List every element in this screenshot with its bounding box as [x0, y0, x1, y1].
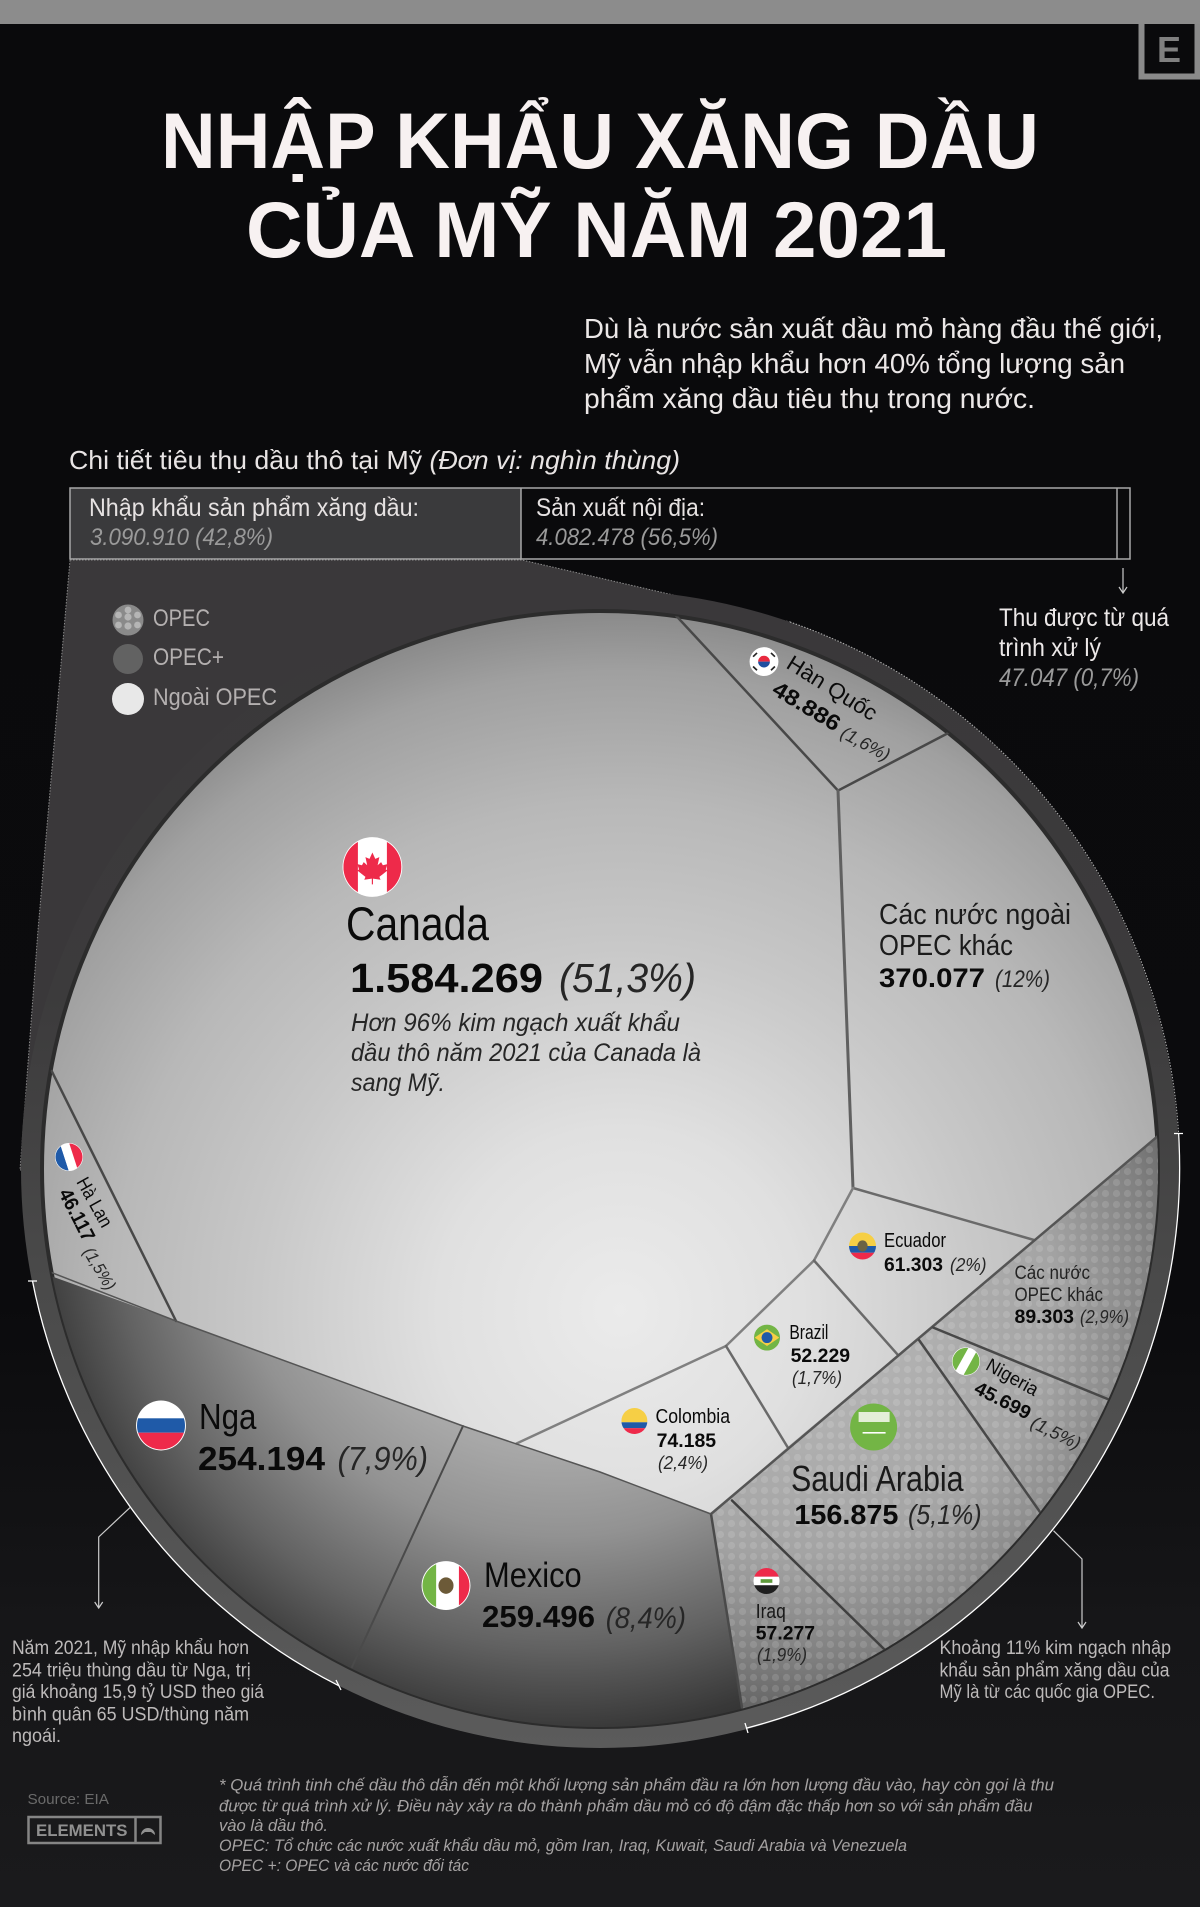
label: Russia: 254.194 — [198, 1440, 326, 1477]
flag: Netherlands — [55, 1143, 83, 1171]
label: other OPEC countries: OPEC khác — [1014, 1285, 1103, 1306]
legend item: OPEC+ — [113, 644, 224, 674]
footnotes: vào là dầu thô. — [219, 1816, 328, 1835]
label: Ecuador — [849, 1230, 986, 1276]
label: Ecuador: (2%) — [950, 1255, 986, 1275]
stacked bar: crude oil consumption split: Nhập khẩu sản phẩm xăng dầu: — [89, 494, 419, 522]
label: Iraq: (1,9%) — [757, 1645, 807, 1665]
label: other non-OPEC countries — [879, 899, 1071, 993]
legend — [112, 604, 277, 715]
leader arrow: Russia note — [95, 1508, 130, 1608]
note: refinery processing gain: trình xử lý — [999, 634, 1101, 662]
label: Colombia: 74.185 — [657, 1431, 717, 1452]
label: Russia: (7,9%) — [338, 1440, 428, 1477]
note: Russia imports: ngoái. — [12, 1726, 61, 1747]
label: Mexico: 259.496 — [482, 1599, 595, 1634]
intro text — [584, 313, 1163, 414]
label: Russia: Nga — [199, 1396, 257, 1437]
legend item: non-OPEC — [112, 683, 277, 715]
logo: Elements: ELEMENTS — [36, 1821, 128, 1840]
note: OPEC share: khẩu sản phẩm xăng dầu của — [940, 1660, 1170, 1682]
label: Mexico — [422, 1556, 686, 1635]
footnotes: * Quá trình tinh chế dầu thô dẫn đến một khối lượng sản phẩm đầu ra lớn hơn lượng đầu vào, hay còn gọi là thu — [219, 1775, 1055, 1794]
label: Saudi Arabia — [791, 1404, 982, 1530]
label: Nigeria: 45.699 — [971, 1378, 1034, 1424]
label: Ecuador: 61.303 — [884, 1255, 943, 1276]
segment dividers — [40, 612, 1165, 1708]
flag: Ecuador — [849, 1232, 876, 1260]
note: refinery processing gain: Thu được từ quá — [999, 604, 1169, 632]
label: Canada: (51,3%) — [559, 955, 696, 1001]
flag: Colombia — [621, 1408, 647, 1434]
label: Nigeria: Nigeria — [982, 1355, 1042, 1401]
label: Canada: sang Mỹ. — [351, 1069, 445, 1097]
footnotes — [219, 1775, 1055, 1875]
note: Russia imports: Năm 2021, Mỹ nhập khẩu hơn — [12, 1638, 249, 1659]
chart: circular treemap of imports by country — [0, 590, 1200, 1790]
flag: South Korea — [750, 647, 778, 676]
label: Brazil: (1,7%) — [792, 1368, 842, 1388]
intro text: Dù là nước sản xuất dầu mỏ hàng đầu thế giới, — [584, 313, 1163, 344]
legend item: OPEC — [112, 604, 210, 636]
label: Netherlands — [55, 1143, 116, 1290]
label: Iraq: 57.277 — [756, 1624, 815, 1645]
bracket arc: OPEC note — [745, 1134, 1183, 1733]
label: Netherlands: (1,5%) — [79, 1244, 120, 1294]
flag: Mexico — [422, 1561, 470, 1610]
flag: Nigeria — [952, 1347, 980, 1376]
flag: Iraq — [754, 1568, 780, 1594]
logo: E badge — [1142, 24, 1198, 76]
label: South Korea: 48.886 — [768, 676, 845, 736]
bar chart heading: Chi tiết tiêu thụ dầu thô tại Mỹ (Đơn vị: nghìn thùng) — [69, 445, 680, 475]
stacked bar: crude oil consumption split: 4.082.478 (56,5%) — [536, 524, 718, 551]
label: other OPEC countries — [1014, 1263, 1129, 1328]
stacked bar: crude oil consumption split — [70, 488, 1130, 559]
stacked bar: crude oil consumption split: Sản xuất nội địa: — [536, 494, 705, 522]
flag: Brazil — [754, 1325, 780, 1351]
arrow to refinery gain note — [1119, 568, 1127, 593]
legend item: OPEC+: OPEC+ — [153, 644, 224, 671]
label: Canada: Canada — [346, 897, 490, 950]
label: other non-OPEC countries: OPEC khác — [879, 930, 1013, 962]
footnotes: OPEC +: OPEC và các nước đối tác — [219, 1856, 469, 1875]
label: Brazil — [754, 1322, 850, 1388]
footnotes: OPEC: Tổ chức các nước xuất khẩu dầu mỏ, gồm Iran, Iraq, Kuwait, Saudi Arabia và Venezuela — [219, 1836, 907, 1855]
label: other non-OPEC countries: (12%) — [995, 966, 1050, 993]
flag: Russia — [136, 1401, 186, 1450]
note: OPEC share: Mỹ là từ các quốc gia OPEC. — [940, 1682, 1155, 1703]
flag: Saudi Arabia — [850, 1404, 897, 1450]
label: Canada: dầu thô năm 2021 của Canada là — [351, 1039, 701, 1067]
note: refinery processing gain: 47.047 (0,7%) — [999, 664, 1139, 692]
legend item: non-OPEC: Ngoài OPEC — [153, 684, 277, 711]
label: Iraq: Iraq — [756, 1601, 786, 1623]
label: other non-OPEC countries: 370.077 — [879, 963, 985, 993]
label: Russia — [136, 1396, 428, 1477]
logo: E badge: E — [1157, 29, 1181, 70]
note: OPEC share: Khoảng 11% kim ngạch nhập — [940, 1638, 1171, 1659]
note: Russia imports: 254 triệu thùng dầu từ Nga, trị — [12, 1660, 251, 1682]
label: Colombia: (2,4%) — [658, 1453, 708, 1473]
leader arrow: OPEC note — [1054, 1531, 1086, 1628]
label: Mexico: Mexico — [484, 1556, 582, 1595]
label: Netherlands: Hà Lan — [72, 1174, 116, 1231]
label: Nigeria: (1,5%) — [1028, 1412, 1084, 1454]
label: South Korea: (1,6%) — [837, 723, 894, 765]
label: Mexico: (8,4%) — [606, 1602, 686, 1635]
label: Canada — [343, 837, 701, 1097]
intro text: phẩm xăng dầu tiêu thụ trong nước. — [584, 383, 1035, 414]
note: Russia imports — [12, 1638, 264, 1747]
label: Saudi Arabia: 156.875 — [794, 1499, 898, 1530]
segment: OPEC countries — [712, 1138, 1158, 1708]
note: refinery processing gain — [999, 604, 1169, 692]
wedge linking imports bar to circle — [20, 560, 790, 1170]
logo: Elements — [28, 1817, 160, 1843]
legend item: OPEC: OPEC — [153, 605, 210, 632]
label: other non-OPEC countries: Các nước ngoài — [879, 899, 1071, 931]
title: CỦA MỸ NĂM 2021 — [246, 185, 947, 274]
intro text: Mỹ vẫn nhập khẩu hơn 40% tổng lượng sản — [584, 348, 1125, 379]
label: Ecuador: Ecuador — [884, 1230, 946, 1252]
segment: Russia and Mexico (OPEC+) — [52, 1276, 741, 1727]
footnotes: được từ quá trình xử lý. Điều này xảy ra do thành phẩm dầu mỏ có độ đậm đặc thấp hơn so với sản phẩm đầu — [219, 1796, 1033, 1815]
label: Saudi Arabia: Saudi Arabia — [791, 1458, 964, 1499]
label: other OPEC countries: (2,9%) — [1080, 1307, 1129, 1327]
bracket arc: Russia note — [28, 1281, 341, 1690]
label: Colombia: Colombia — [656, 1406, 731, 1428]
note: OPEC share — [940, 1638, 1171, 1703]
label: Iraq — [754, 1568, 815, 1665]
label: other OPEC countries: 89.303 — [1014, 1307, 1074, 1328]
title: NHẬP KHẨU XĂNG DẦU — [161, 96, 1039, 185]
label: Canada: Hơn 96% kim ngạch xuất khẩu — [351, 1009, 680, 1037]
title — [161, 96, 1039, 274]
label: Nigeria — [952, 1347, 1080, 1451]
label: Saudi Arabia: (5,1%) — [908, 1499, 982, 1530]
stacked bar: crude oil consumption split: 3.090.910 (42,8%) — [90, 524, 273, 551]
label: South Korea — [750, 647, 894, 765]
label: Canada: 1.584.269 — [350, 955, 543, 1001]
label: other OPEC countries: Các nước — [1014, 1263, 1090, 1284]
note: Russia imports: giá khoảng 15,9 tỷ USD theo giá — [12, 1682, 264, 1703]
note: Russia imports: bình quân 65 USD/thùng năm — [12, 1704, 249, 1726]
label: Netherlands: 46.117 — [54, 1185, 99, 1245]
label: South Korea: Hàn Quốc — [782, 650, 882, 726]
label: Colombia — [621, 1406, 731, 1473]
source: Source: EIA — [28, 1791, 109, 1808]
label: Brazil: 52.229 — [791, 1346, 850, 1367]
label: Brazil: Brazil — [789, 1322, 828, 1344]
flag: Canada — [343, 837, 402, 897]
